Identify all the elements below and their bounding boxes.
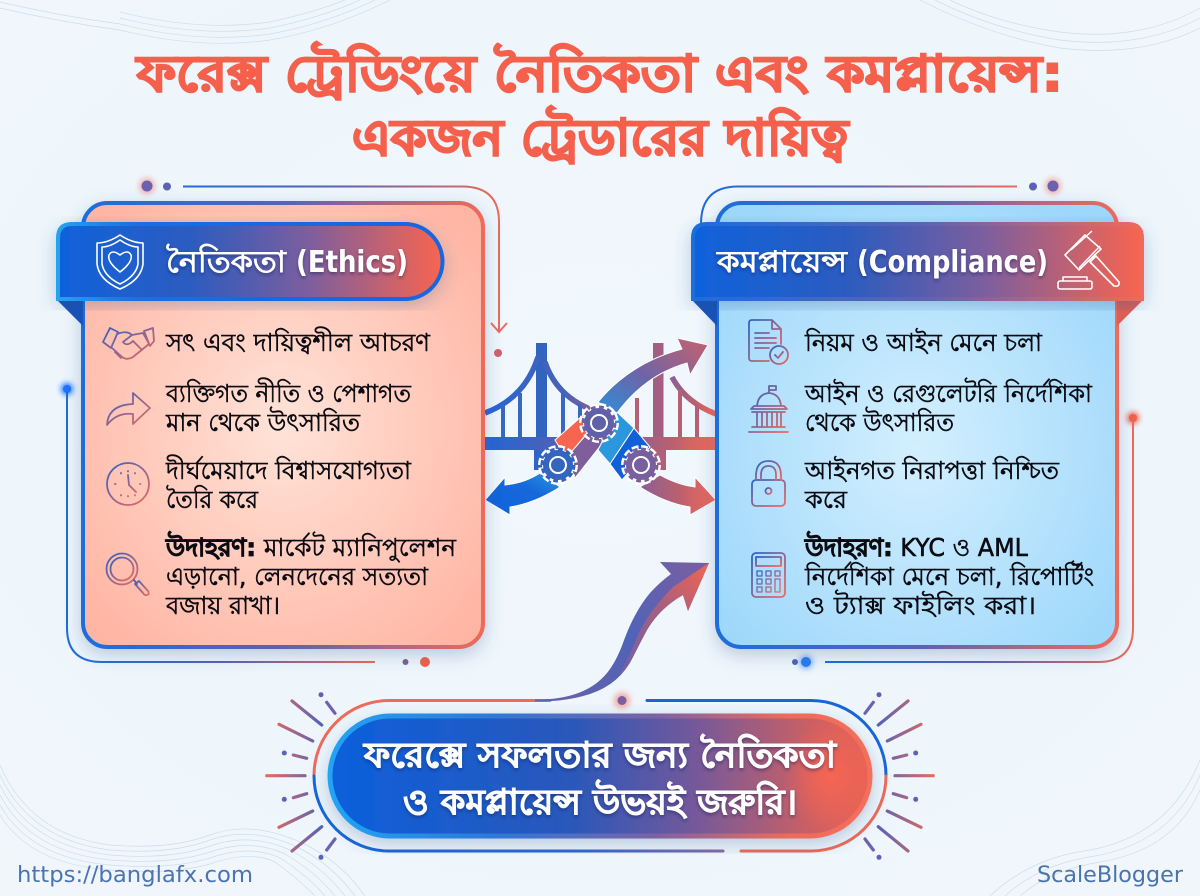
right half of bridge (626, 343, 716, 470)
central bridge illustration (484, 338, 716, 515)
compliance item: example: ও ট্যাক্স ফাইলিং করা। (805, 590, 1036, 620)
ethics item: honest conduct: সৎ এবং দায়িত্বশীল আচরণ (165, 327, 431, 357)
compliance item: regulatory (749, 378, 1093, 437)
ethics item: example: বজায় রাখা। (165, 591, 280, 620)
callout dot (614, 692, 630, 708)
compliance item: legal security: আইনগত নিরাপত্তা নিশ্চিত (804, 456, 1060, 485)
ethics heading text: (Ethics) (296, 245, 408, 280)
icon: gavel (1058, 231, 1119, 289)
crossed band: blue (598, 412, 650, 480)
ethics item: personal values: মান থেকে উৎসারিত (165, 407, 361, 437)
compliance item: legal security: করে (804, 485, 848, 514)
ethics item: long-term trust (107, 455, 412, 514)
panel: compliance (692, 203, 1143, 647)
ethics item: personal values (107, 378, 412, 437)
compliance heading text: (Compliance) (857, 245, 1048, 280)
callout pill (330, 716, 870, 836)
ethics header pill (58, 224, 442, 299)
decorative connectors: left panel (61, 178, 507, 667)
compliance heading text: কমপ্লায়েন্স (716, 245, 849, 280)
compliance ribbon fold right (1117, 300, 1143, 326)
callout text: ফরেক্সে সফলতার জন্য নৈতিকতা (362, 734, 838, 776)
title (135, 42, 1063, 167)
callout (314, 700, 886, 851)
compliance item: legal security (752, 456, 1060, 514)
ethics item: long-term trust: দীর্ঘমেয়াদে বিশ্বাসযোগ্যতা (165, 455, 412, 485)
gear right (625, 449, 657, 481)
ethics item: example: এড়ানো, লেনদেনের সত্যতা (166, 562, 429, 591)
gear top (583, 407, 615, 439)
crossed arrow down-left (485, 473, 560, 515)
ethics item: long-term trust: তৈরি করে (166, 485, 259, 514)
compliance header (693, 224, 1142, 299)
compliance item: example: নির্দেশিকা মেনে চলা, রিপোর্টিং (804, 561, 1094, 591)
compliance item: regulatory: আইন ও রেগুলেটরি নির্দেশিকা (804, 378, 1093, 408)
title: একজন ট্রেডারের দায়িত্ব (352, 106, 849, 167)
panel: ethics (57, 203, 483, 647)
compliance item: rules: নিয়ম ও আইন মেনে চলা (804, 328, 1043, 357)
footer: site url: https://banglafx.com (17, 863, 253, 888)
ethics heading text: নৈতিকতা (165, 243, 287, 280)
crossed arrow up-right (598, 338, 708, 413)
left half of bridge (484, 343, 590, 470)
decorative connectors: right panel (701, 178, 1139, 669)
ethics item: example: উদাহরণ: মার্কেট ম্যানিপুলেশন (165, 531, 457, 563)
compliance item: regulatory: থেকে উৎসারিত (805, 407, 955, 437)
ethics item: example (106, 531, 457, 620)
callout outer ring (314, 700, 886, 851)
compliance item: example (752, 531, 1094, 620)
ethics card body (83, 203, 483, 647)
compliance item: example: উদাহরণ: KYC ও AML (804, 531, 1028, 562)
callout text: ও কমপ্লায়েন্স উভয়ই জরুরি। (403, 779, 797, 823)
callout text (362, 734, 838, 823)
crossed band: orange and purple (555, 415, 605, 478)
ethics ribbon fold (57, 300, 83, 326)
gear left (542, 449, 574, 481)
icon: shield with heart (97, 235, 143, 289)
title: ফরেক্স ট্রেডিংয়ে নৈতিকতা এবং কমপ্লায়েন্স: (135, 42, 1063, 103)
compliance ribbon fold left (692, 300, 717, 326)
ethics item: personal values: ব্যক্তিগত নীতি ও পেশাগত (165, 378, 412, 408)
crossed arrow down-right (640, 475, 716, 515)
compliance item: rules (749, 320, 1043, 364)
compliance card body (717, 203, 1117, 647)
arrow: callout to compliance (535, 562, 709, 702)
footer: brand: ScaleBlogger (1037, 863, 1184, 888)
sun rays around callout (267, 692, 933, 860)
